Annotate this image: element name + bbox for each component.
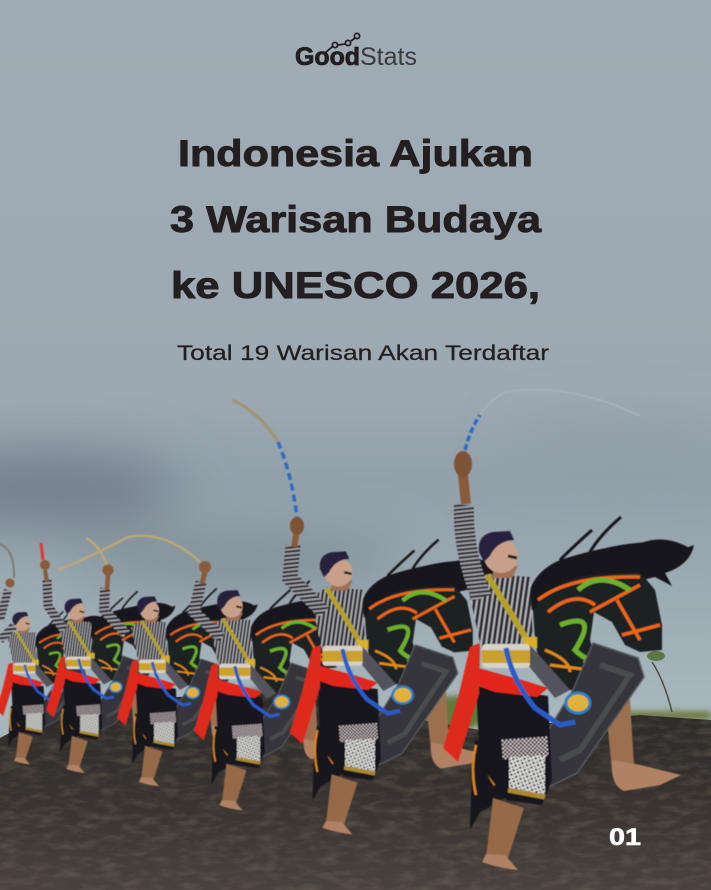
title: 3 Warisan Budaya bbox=[170, 199, 541, 240]
whip: third dancer bbox=[58, 536, 200, 570]
front dancer with horse bbox=[443, 517, 694, 870]
ground bbox=[0, 690, 711, 890]
whip: front dancer bbox=[480, 390, 640, 416]
front dancer arm bbox=[454, 451, 482, 598]
dancer 5 arm bbox=[290, 517, 324, 612]
whip: far left bbox=[0, 544, 14, 578]
storm clouds bbox=[0, 429, 711, 586]
title: ke UNESCO 2026, bbox=[171, 265, 540, 306]
title bbox=[170, 133, 541, 306]
page number: 01 bbox=[609, 824, 641, 851]
logo: GoodStats bbox=[295, 33, 417, 71]
ground texture bbox=[0, 690, 711, 890]
whip: fifth dancer bbox=[233, 400, 278, 442]
dancer 3 arm bbox=[102, 564, 126, 634]
horizon grass bbox=[235, 687, 711, 730]
logo wordmark: GoodStats bbox=[295, 43, 417, 71]
whip handle: fifth dancer bbox=[278, 442, 297, 518]
main dancers group bbox=[0, 390, 694, 870]
small tree bbox=[647, 651, 672, 712]
dancer 1 bbox=[0, 606, 109, 764]
dancer 2 arm bbox=[40, 560, 64, 630]
dancer 3 bbox=[117, 589, 258, 786]
dancer 4 bbox=[194, 581, 357, 811]
title: Indonesia Ajukan bbox=[178, 133, 533, 174]
logo chart line bbox=[325, 33, 360, 53]
whip handle: front dancer bbox=[465, 415, 480, 450]
dancer 5 bbox=[290, 540, 499, 834]
whip: second dancer stick bbox=[41, 543, 43, 560]
dancer 1 arm bbox=[0, 578, 14, 640]
dancer 2 bbox=[46, 591, 175, 773]
subtitle: Total 19 Warisan Akan Terdaftar bbox=[177, 342, 549, 365]
dancer 4 arm bbox=[194, 561, 222, 638]
